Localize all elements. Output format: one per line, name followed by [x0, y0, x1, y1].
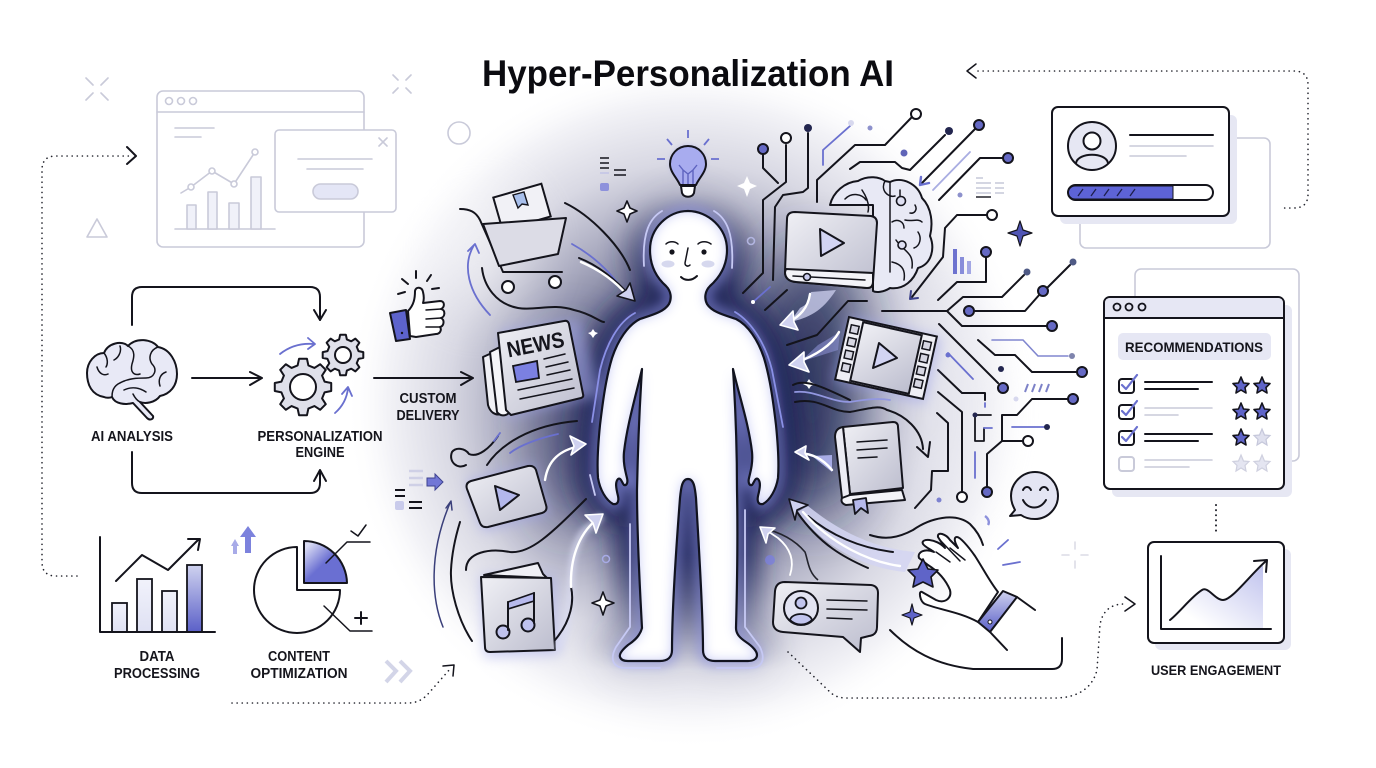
icon: book [835, 422, 905, 514]
arrows from cart to figure [572, 244, 635, 301]
arrow from music [555, 514, 603, 650]
icon: lightbulb [657, 130, 719, 197]
small navy sparkle [902, 604, 922, 625]
popup dialog [275, 130, 396, 212]
label: content optimization: CONTENT [268, 649, 330, 665]
icon: hand holding star [908, 534, 1035, 650]
hand base curve [890, 630, 1062, 669]
icon: film strip [832, 315, 942, 405]
label: data processing: PROCESSING [114, 666, 200, 682]
label: content optimization: OPTIMIZATION [250, 666, 348, 682]
flow connector: analysis to engine bottom [132, 452, 326, 493]
flow wave above hand [870, 516, 1020, 565]
label: data processing [114, 649, 200, 682]
label: content optimization [250, 649, 348, 682]
flow connector: brain to gears top [132, 287, 326, 325]
row 2 [1119, 401, 1270, 419]
arrow: custom delivery [374, 372, 473, 385]
heading badge: RECOMMENDATIONS [1125, 339, 1263, 355]
panel: profile card [1052, 107, 1270, 248]
icon: small list [976, 178, 1004, 197]
small list icons left [395, 471, 443, 510]
icon: thumbs up [390, 271, 444, 341]
icon: chevrons [386, 661, 410, 682]
label: AI analysis: AI ANALYSIS [91, 429, 173, 445]
label: custom delivery [396, 391, 460, 424]
icon: shopping cart [460, 184, 566, 293]
arrow from film [789, 332, 840, 372]
avatar [1068, 122, 1116, 170]
flow lines left of figure [434, 203, 630, 641]
face [662, 242, 714, 280]
label: personalization engine: ENGINE [296, 445, 345, 461]
heading badge [1118, 333, 1271, 360]
arrow from book [795, 446, 832, 472]
icon: brain [87, 340, 177, 419]
arrow from profile bubble [760, 527, 818, 580]
label: personalization engine: PERSONALIZATION [258, 429, 382, 445]
icon: news [483, 318, 600, 420]
arrow: brain to engine [192, 372, 262, 385]
arrow from video player [780, 290, 836, 330]
figure: person [590, 211, 783, 668]
dotted arrow: hand to engagement [788, 597, 1135, 698]
flow curves near book [793, 383, 930, 457]
label: data processing: DATA [140, 649, 175, 665]
label: custom delivery: CUSTOM [400, 391, 456, 407]
progress bar [1068, 185, 1213, 200]
dotted arrow: optimization to figure [232, 665, 454, 703]
icon: video card left [466, 463, 550, 532]
icon: small bar chart [953, 249, 971, 274]
icon: up arrows [231, 526, 256, 554]
icon: video player [785, 212, 877, 288]
arrow from video [545, 436, 586, 480]
circuit traces upper right [743, 109, 1076, 345]
icon: gears [275, 335, 363, 415]
title feedback dotted arrow [967, 64, 1308, 208]
panel: recommendations window [1104, 269, 1299, 497]
central aura glow [379, 94, 1005, 716]
row 3 [1119, 427, 1270, 445]
icon: smiley bubble [1010, 472, 1058, 519]
left dotted loop arrow [42, 147, 136, 576]
decorative sparks and shapes [86, 75, 470, 237]
icon: navy sparkle [1008, 221, 1032, 246]
decorative plus [1062, 542, 1088, 568]
label: user engagement: USER ENGAGEMENT [1151, 662, 1281, 678]
small list icon top [600, 158, 626, 191]
icon: data processing chart [100, 537, 215, 632]
sparkle decorations near figure [588, 176, 815, 615]
icon: music book [480, 563, 560, 658]
label: personalization engine [258, 429, 382, 461]
icon: news: NEWS [505, 327, 566, 362]
title: Hyper-Personalization AI [482, 53, 894, 94]
label: custom delivery: DELIVERY [396, 408, 460, 424]
icon: brain with circuits [830, 177, 932, 292]
panel: dashboard window [157, 91, 396, 247]
panel: profile chat bubble [773, 582, 878, 652]
panel: user engagement chart [1148, 542, 1291, 650]
big arrow from hand [789, 499, 915, 572]
dotted connector [1215, 505, 1217, 534]
circuit traces lower right [915, 324, 1087, 508]
row 4 [1119, 455, 1270, 471]
row 1 [1119, 375, 1270, 393]
icon: content optimization pie [254, 525, 372, 633]
